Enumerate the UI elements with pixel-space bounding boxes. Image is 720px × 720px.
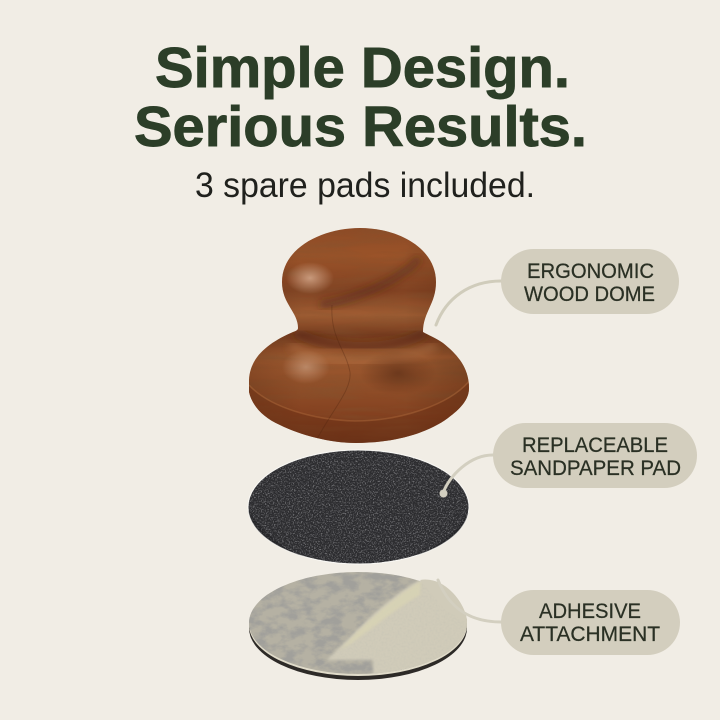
title: Serious Results. bbox=[134, 95, 587, 159]
callout: adhesive attachment bbox=[438, 580, 680, 655]
pill label: ATTACHMENT bbox=[520, 622, 660, 646]
callout: replaceable sandpaper pad bbox=[440, 423, 697, 498]
subtitle: 3 spare pads included. bbox=[195, 166, 535, 205]
callout: ergonomic wood dome bbox=[436, 249, 679, 325]
infographic canvas bbox=[135, 46, 697, 680]
pill label bbox=[493, 423, 697, 488]
pill label bbox=[501, 249, 679, 314]
pill label bbox=[501, 590, 680, 655]
pill label: REPLACEABLE bbox=[522, 433, 668, 457]
icon: ergonomic wood dome bbox=[245, 225, 473, 446]
icon: black sandpaper pad bbox=[248, 450, 470, 570]
icon: adhesive backing pad bbox=[248, 570, 470, 680]
connector line bbox=[438, 580, 501, 622]
connector line with dot bbox=[440, 455, 493, 498]
pill label: WOOD DOME bbox=[524, 282, 655, 306]
pill label: SANDPAPER PAD bbox=[510, 456, 681, 480]
pill label: ADHESIVE bbox=[539, 599, 641, 623]
pill label: ERGONOMIC bbox=[527, 259, 654, 283]
title: Simple Design. bbox=[155, 36, 570, 100]
title bbox=[134, 36, 587, 159]
connector line bbox=[436, 281, 501, 325]
